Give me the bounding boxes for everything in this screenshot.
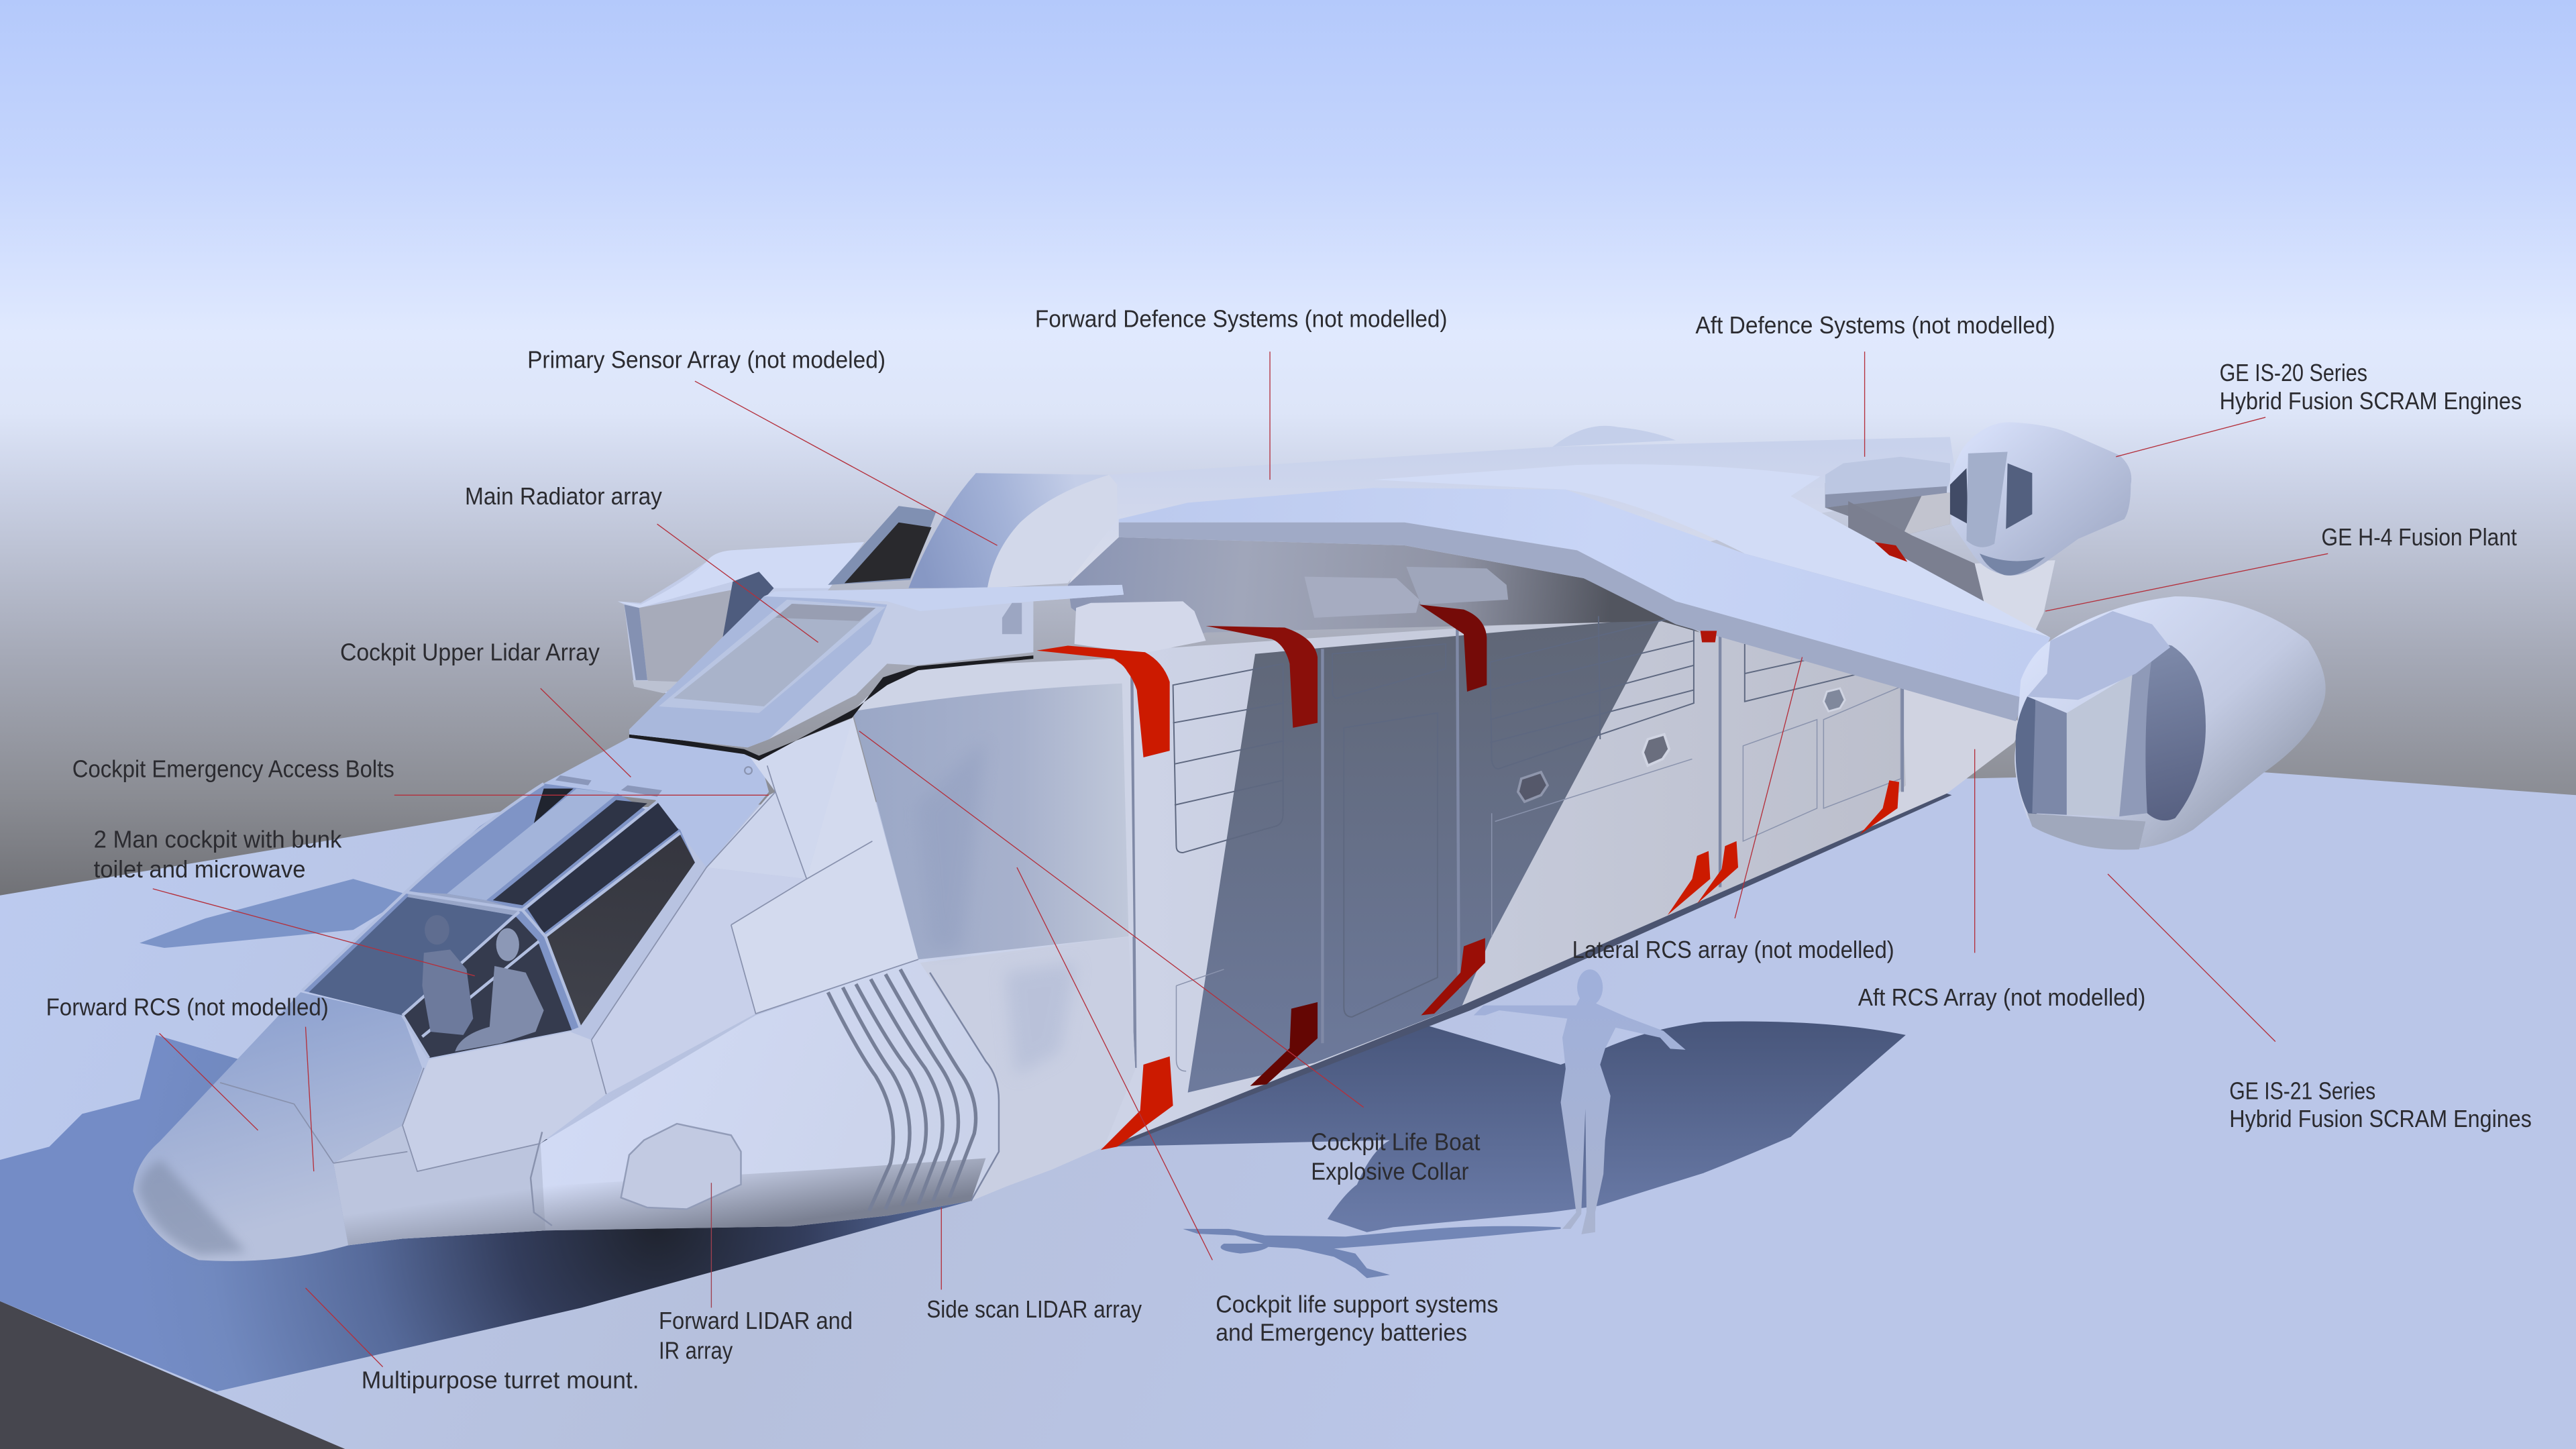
callout: GE IS-21 engines: GE IS-21 Series — [2229, 1077, 2375, 1104]
upper dorsal spine — [1068, 426, 1958, 588]
cargo box one — [1075, 601, 1206, 654]
hull lower shading — [335, 1159, 985, 1245]
cockpit upper lidar housing — [629, 585, 1124, 747]
callout: GE IS-20 engines: Hybrid Fusion SCRAM Engines — [2220, 388, 2522, 415]
callout: Primary Sensor Array: Primary Sensor Array (not modeled) — [527, 347, 885, 374]
vent slats — [828, 969, 976, 1211]
nose cone — [133, 992, 422, 1261]
section panel seams — [1132, 621, 1902, 1068]
callout: GE IS-20 engines — [2220, 360, 2522, 415]
rear small engine — [1950, 422, 2131, 576]
cargo box two — [1304, 577, 1419, 618]
forward side hull panel — [592, 867, 806, 1094]
callout: Main Radiator array: Main Radiator array — [465, 483, 662, 510]
callout: Forward LIDAR and IR array — [659, 1307, 853, 1364]
forward hull flank — [333, 936, 1135, 1245]
callout: Cockpit Life Boat Explosive Collar: Explosive Collar — [1311, 1158, 1468, 1185]
under wing recess — [1068, 537, 1701, 654]
callout: Forward LIDAR and IR array: Forward LIDAR and — [659, 1307, 853, 1334]
callout: Cockpit Upper Lidar Array: Cockpit Upper Lidar Array — [340, 639, 600, 665]
callout: Aft Defence Systems: Aft Defence Systems (not modelled) — [1695, 312, 2055, 339]
standing human figure for scale — [1474, 969, 1686, 1234]
life boat side panel — [853, 684, 1128, 959]
callout: 2 Man cockpit: toilet and microwave — [94, 856, 306, 883]
hull base strip — [1104, 794, 1951, 1148]
callout: Cockpit life support: and Emergency batteries — [1216, 1319, 1467, 1346]
callout: Forward Defence Systems: Forward Defence Systems (not modelled) — [1035, 305, 1448, 332]
roof strips and bolt — [555, 767, 752, 797]
sensor array mass — [828, 473, 1117, 588]
callout: Cockpit Life Boat Explosive Collar — [1311, 1128, 1481, 1185]
black seal band — [629, 655, 1033, 761]
upper forward side panel — [731, 716, 918, 1014]
hull cast shadow — [1188, 618, 1661, 1093]
aft defence housing — [1825, 457, 1950, 535]
callout: Aft RCS Array: Aft RCS Array (not modelled) — [1858, 984, 2145, 1011]
aft hull tail — [1865, 674, 2024, 833]
door section B — [1332, 644, 1446, 1017]
large engine nacelle — [2015, 596, 2326, 850]
hull aft lit block — [1975, 560, 2055, 641]
forward LIDAR dome — [531, 1124, 741, 1226]
callout: 2 Man cockpit — [94, 826, 341, 883]
nose and hull seams — [220, 765, 918, 1171]
callout: Lateral RCS array: Lateral RCS array (not modelled) — [1572, 936, 1894, 963]
callout: Multipurpose turret mount: Multipurpose turret mount. — [362, 1366, 639, 1393]
ground shadow of hull and figure — [1104, 1021, 1906, 1232]
small rear ground shadow — [140, 879, 411, 948]
red explosive collars — [1036, 542, 1907, 1150]
main ground shadow under nose — [0, 1035, 1002, 1391]
nose side lower panel — [333, 1126, 545, 1245]
callout: Cockpit life support: Cockpit life support systems — [1216, 1291, 1498, 1318]
callout: Cockpit Emergency Access Bolts: Cockpit Emergency Access Bolts — [72, 755, 394, 782]
port windows — [1518, 688, 1845, 802]
callout: 2 Man cockpit: 2 Man cockpit with bunk — [94, 826, 341, 853]
ground plane — [0, 772, 2576, 1449]
callout: GE H-4 Fusion Plant: GE H-4 Fusion Plant — [2321, 524, 2517, 551]
spacecraft — [133, 422, 2326, 1261]
callout: Side scan LIDAR array: Side scan LIDAR array — [926, 1296, 1142, 1323]
callout: Forward RCS: Forward RCS (not modelled) — [46, 994, 329, 1020]
intake recess shading — [917, 739, 985, 950]
hatch panel section C — [1490, 612, 1694, 936]
cockpit glazing — [303, 784, 695, 1058]
leader lines — [153, 352, 2328, 1367]
hull aft shaded block — [1848, 501, 1986, 611]
hatch panel section D — [1743, 644, 1900, 841]
callout: Cockpit life support — [1216, 1291, 1498, 1346]
hull side lit — [1104, 611, 1906, 1148]
seated crew figures — [422, 915, 544, 1051]
callout: GE IS-20 engines: GE IS-20 Series — [2220, 360, 2367, 386]
hatch panel section A — [1173, 663, 1283, 1071]
life boat module — [856, 659, 1134, 959]
figure cast shadow — [1183, 1226, 1561, 1278]
wing — [1119, 464, 2050, 721]
callout: Cockpit Life Boat Explosive Collar: Cockpit Life Boat — [1311, 1128, 1481, 1155]
hull outline curve — [930, 973, 999, 1201]
rear left engine pod — [618, 542, 864, 693]
cargo box three — [1406, 567, 1508, 604]
callout: GE IS-21 engines: Hybrid Fusion SCRAM Engines — [2229, 1106, 2532, 1132]
hull aft-of-vent panel — [920, 936, 1135, 1201]
callout: GE IS-21 engines — [2229, 1077, 2532, 1132]
callout: Forward LIDAR and IR array: IR array — [659, 1337, 733, 1364]
dark floor corner — [0, 1301, 345, 1449]
hull top deck — [537, 738, 769, 867]
hull panel blue shading — [1006, 963, 1076, 1076]
cockpit cheek panel — [402, 1032, 606, 1171]
